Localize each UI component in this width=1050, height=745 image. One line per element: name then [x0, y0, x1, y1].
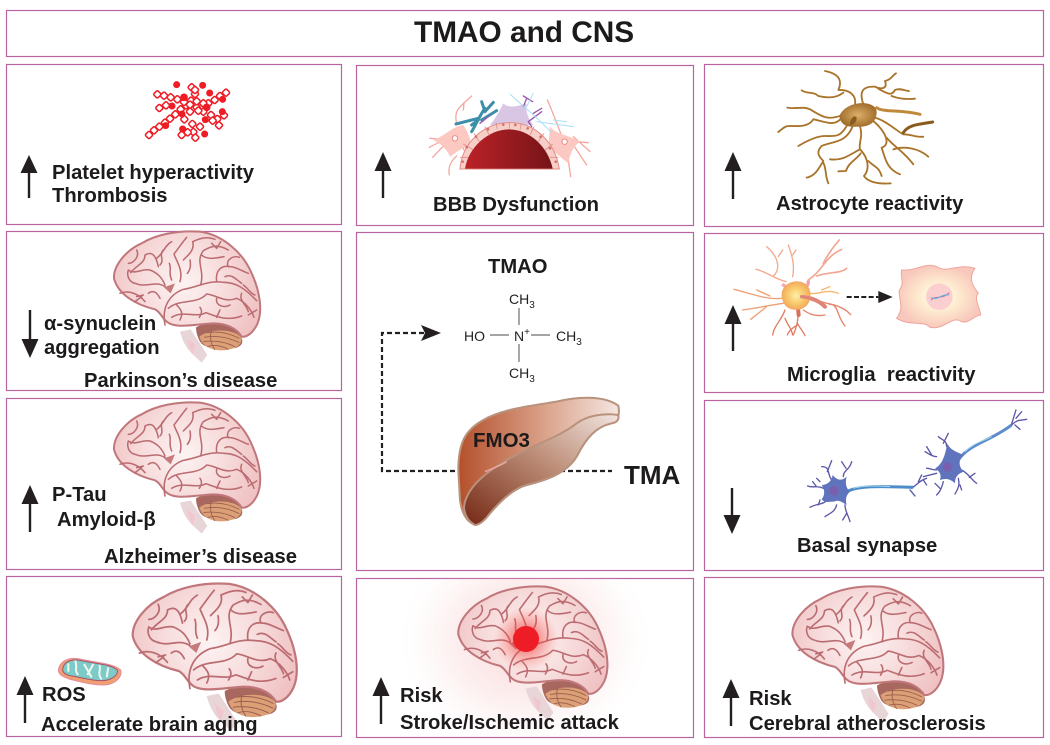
arrow: up: [724, 305, 742, 351]
arrow: up: [372, 677, 390, 724]
chemical structure: [464, 291, 582, 385]
panel: TMAO and liver: [356, 232, 694, 570]
arrow: up: [724, 152, 742, 199]
chemical structure: 3: [529, 300, 535, 311]
label: astrocyte: Astrocyte reactivity: [776, 193, 964, 215]
panel: Parkinson's disease: [6, 231, 342, 392]
icon: brain: [133, 584, 297, 731]
label: platelet: Platelet hyperactivity: [52, 162, 255, 184]
label: Parkinson's: Parkinson’s disease: [84, 370, 277, 392]
chemical structure: CH: [556, 328, 576, 344]
arrow: up: [16, 676, 34, 723]
arrow: up: [722, 679, 740, 726]
icon: liver: [458, 398, 619, 525]
label: thrombosis: Thrombosis: [52, 185, 168, 207]
label: ROS: ROS: [42, 684, 86, 706]
label: TMA: TMA: [624, 460, 681, 490]
icon: blood brain barrier vessel: [429, 93, 590, 177]
panel: microglia: [704, 234, 1044, 392]
icon: microglia: [734, 240, 981, 336]
icon: brain: [458, 586, 607, 720]
icon: platelet cluster: [145, 81, 230, 142]
chemical structure: N: [514, 328, 524, 344]
label: brain aging: Accelerate brain aging: [41, 714, 258, 736]
label: stroke: Stroke/Ischemic attack: [400, 712, 620, 734]
chemical structure: +: [524, 327, 530, 338]
panel: BBB dysfunction: [356, 66, 694, 226]
panel: astrocyte: [704, 64, 1044, 226]
icon: neurons: [808, 410, 1027, 522]
panel: basal synapse: [704, 400, 1044, 570]
title panel: [6, 10, 1044, 56]
panel: ROS brain aging: [6, 576, 342, 736]
label: atherosclerosis: Cerebral atherosclerosis: [749, 713, 986, 735]
title panel: TMAO and CNS: [414, 16, 634, 49]
chemical structure: 3: [576, 337, 582, 348]
label: Amyloid-beta: Amyloid-β: [57, 509, 156, 531]
label: microglia: Microglia reactivity: [787, 364, 976, 386]
chemical structure: 3: [529, 374, 535, 385]
dashed arrow: liver to TMAO: [382, 325, 463, 471]
arrow: down: [22, 310, 38, 358]
panel: cerebral atherosclerosis: [704, 578, 1044, 738]
label: FMO3: FMO3: [473, 429, 530, 452]
label: P-Tau: P-Tau: [52, 484, 107, 506]
arrow: up: [374, 152, 392, 198]
panel: platelet hyperactivity: [6, 64, 342, 224]
label: TMAO: TMAO: [488, 256, 547, 278]
icon: brain: [114, 231, 260, 363]
label: BBB: BBB Dysfunction: [433, 194, 599, 216]
arrow: down: [724, 488, 740, 534]
icon: brain: [792, 586, 943, 722]
label: risk: Risk: [400, 685, 443, 707]
label: risk: Risk: [749, 688, 792, 710]
glow: [433, 578, 616, 720]
chemical structure: HO: [464, 328, 485, 344]
panel: stroke risk: [356, 578, 694, 738]
icon: mitochondrion: [58, 658, 121, 685]
chemical structure: CH: [509, 291, 529, 307]
arrow: up: [20, 155, 38, 198]
icon: astrocyte: [778, 71, 933, 184]
icon: ischemic spot: [494, 607, 558, 671]
icon: brain: [114, 402, 260, 534]
dashed line: TMA to liver: [560, 470, 612, 472]
arrow: up: [22, 485, 38, 532]
label: alpha-synuclein: α-synuclein: [44, 313, 156, 335]
panel: Alzheimer's disease: [6, 398, 342, 570]
chemical structure: CH: [509, 365, 529, 381]
label: basal synapse: Basal synapse: [797, 535, 937, 557]
label: aggregation: aggregation: [44, 337, 160, 359]
label: Alzheimer's: Alzheimer’s disease: [104, 546, 297, 568]
